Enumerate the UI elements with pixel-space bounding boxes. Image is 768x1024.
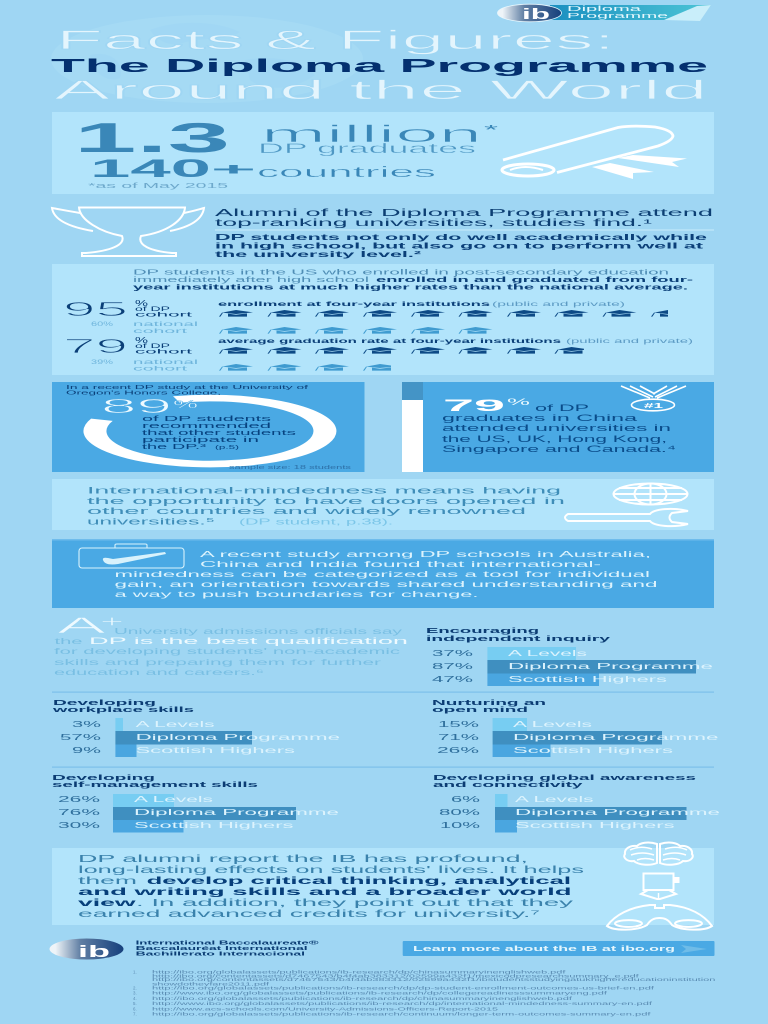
- label: enrollment: (public and private): [492, 301, 625, 308]
- text: organisation names: International Baccalaureate®: [136, 940, 319, 946]
- quote text: universities.⁵: [87, 516, 215, 528]
- label: graduation: average graduation rate at four-year institutions: [218, 338, 562, 345]
- stat: 79% of DP cohort: %: [135, 336, 148, 345]
- values: 6%: [451, 795, 480, 804]
- stat: 79% of DP cohort: 79: [63, 336, 128, 358]
- stat: 95% of DP cohort: %: [135, 299, 148, 308]
- pictogram: 39% national graduation caps: [219, 364, 397, 371]
- alumni text: develop critical thinking, analytical: [147, 876, 571, 887]
- asterisk: *: [484, 122, 498, 137]
- stat: 39% national cohort: national: [133, 359, 199, 366]
- text: study findings: [114, 549, 658, 599]
- pictogram: 60% national enrolment caps: [219, 327, 492, 334]
- references: 4.: [133, 996, 137, 1001]
- chart heading: workplace skills: [51, 705, 194, 714]
- footnote: *as of May 2015: [88, 181, 228, 190]
- chart heading: [52, 773, 258, 789]
- bar labels: [136, 720, 340, 755]
- chart heading: Encouraging: [426, 626, 540, 635]
- icon: binoculars: [607, 905, 712, 930]
- values: 9%: [72, 746, 101, 755]
- values: 57%: [60, 733, 101, 742]
- bar labels: Scottish Highers: [134, 821, 294, 830]
- references: http://ibo.org/globalassets/publications/ib-research/continuum/longer-term-outcomes-summary-en.pdf: [152, 1012, 652, 1016]
- text: alumni statement: [215, 208, 714, 259]
- headline number: 1.3: 1.3: [74, 114, 230, 161]
- text: China: of DP: [535, 403, 589, 413]
- values: 26%: [437, 746, 479, 755]
- text: China: attended universities in: [442, 423, 671, 433]
- panel: US enrolment and graduation: [52, 264, 714, 375]
- bar labels: A Levels: [136, 720, 215, 729]
- values: 71%: [438, 733, 479, 742]
- bar labels: A Levels: [515, 795, 594, 804]
- text: study findings: gain, an orientation towards shared understanding and: [114, 579, 658, 589]
- note: sample size: sample size: 18 students: [229, 465, 351, 471]
- text: university admissions officials: for developing students' non-academic: [54, 647, 400, 656]
- quote text: (DP student, p.38).: [239, 518, 393, 526]
- values: [437, 720, 479, 755]
- bars: [115, 718, 252, 757]
- text: organisation names: [136, 940, 319, 958]
- stat: 60% national cohort: national: [133, 321, 199, 328]
- icon: A+: A: [57, 613, 107, 638]
- text: China: [442, 403, 676, 454]
- icon: A+: [57, 612, 124, 638]
- logo: IB Diploma Programme: ib: [522, 6, 550, 23]
- panel: University of Oregon study: [52, 382, 364, 472]
- panel intro text: year institutions at much higher rates than the national average.: [133, 282, 688, 292]
- stat: 79%: 79: [443, 396, 505, 415]
- bar labels: Diploma Programme: [136, 733, 340, 742]
- stat: 39% national cohort: [91, 359, 199, 372]
- chart heading: Developing: [53, 698, 157, 707]
- chart: developing global awareness and connectivity: [433, 773, 720, 832]
- references: 5.: [133, 1001, 137, 1006]
- references: http://www.ibo.org/globalassets/publications/ib-research/dp/international-mindedness-summary-en.pdf: [152, 1001, 654, 1006]
- stat: 95% of DP cohort: [63, 299, 192, 321]
- alumni text: long-lasting effects on students' lives. It helps: [78, 865, 584, 876]
- values: 26%: [58, 795, 100, 804]
- panel intro text: [133, 268, 695, 292]
- values: 76%: [58, 808, 100, 817]
- references: http://ibo.org/globalassets/publications/ib-research/dp/chinasummaryinenglishweb.pdf: [152, 970, 567, 974]
- chart heading: Nurturing an: [432, 698, 547, 707]
- bars: [113, 794, 296, 832]
- chart: developing workplace skills: [51, 698, 340, 757]
- stat: 60% national cohort: [91, 321, 199, 335]
- text: organisation names: Baccalauréat International: [136, 946, 309, 952]
- icon: A+: +: [100, 612, 124, 631]
- label: enrollment: [218, 301, 625, 308]
- icon: briefcase with tick: [79, 544, 184, 568]
- stat: 89%: %: [173, 399, 199, 411]
- pictogram: 95% DP enrolment caps: [219, 310, 685, 317]
- chart heading: self-management skills: [52, 780, 258, 789]
- quote text: other countries and widely renowned: [87, 506, 526, 517]
- quote text: [87, 486, 565, 528]
- text: recommendation: (p.5): [215, 445, 239, 451]
- bar labels: Scottish Highers: [136, 746, 295, 755]
- label: DP graduates: DP graduates: [258, 141, 477, 156]
- quote text: International-mindedness means having: [87, 486, 561, 496]
- logo: IB Diploma Programme: [498, 4, 711, 23]
- text: China: the US, UK, Hong Kong,: [442, 434, 667, 444]
- progress bar: 79%: [402, 382, 423, 472]
- stat: 95% of DP cohort: of DP: [135, 306, 171, 313]
- panel: alumni report: [52, 843, 714, 930]
- text: university admissions officials: [54, 627, 408, 677]
- alumni text: DP alumni report the IB has profound,: [78, 854, 528, 865]
- values: 87%: [432, 662, 473, 671]
- logo: International Baccalaureate: ib: [78, 942, 110, 961]
- logo: IB Diploma Programme: Diploma: [567, 6, 641, 13]
- text: study findings: A recent study among DP schools in Australia,: [200, 549, 651, 559]
- values: 10%: [440, 821, 480, 830]
- bar labels: Scottish Highers: [515, 821, 675, 830]
- button: learn more: Learn more about the IB at ibo.org: [413, 944, 676, 953]
- text: alumni statement: in high school, but also go on to perform well at: [215, 242, 704, 250]
- references: http://www.ibo.org/globalassets/publications/ib-research/dp/collegereadinesssummaryeng.pdf: [152, 990, 609, 996]
- panel intro: [66, 385, 309, 396]
- chart: developing self-management skills: [52, 773, 339, 832]
- text: recommendation: that other students: [142, 428, 297, 437]
- bar labels: [134, 795, 339, 830]
- chart heading: Developing global awareness: [433, 773, 696, 782]
- logo: IB Diploma Programme: Programme: [567, 13, 668, 20]
- text: study findings: China and India found that international-: [200, 559, 601, 569]
- logo: International Baccalaureate: [50, 938, 124, 961]
- references: 2.: [133, 986, 137, 990]
- text: study findings: mindedness can be categorized as a tool for individual: [114, 569, 650, 579]
- references: http://ibo.org/contentassets/d7467543/b4f4ab383312/02599a432f1/mexicodpresearchsummary_e.pdf: [152, 974, 641, 978]
- text: university admissions officials: DP is the best qualification: [89, 636, 408, 646]
- references: http://ibo.org/globalassets/publications/ib-research/dp/chinasummaryinenglishweb.pdf: [152, 996, 574, 1001]
- panel: international-mindedness quote: [52, 479, 714, 530]
- icon: trophy: [52, 208, 204, 256]
- title: The Diploma Programme: [51, 56, 708, 76]
- title: Facts & Figures:: [56, 25, 615, 55]
- text: university admissions officials: education and careers.⁶: [54, 668, 264, 677]
- chart heading: open mind: [432, 705, 529, 714]
- references: [133, 970, 717, 1016]
- stat: 95% of DP cohort: 95: [63, 299, 128, 321]
- bar labels: Diploma Programme: [513, 733, 718, 742]
- icon: brain: [624, 843, 693, 865]
- chart heading: Developing: [52, 773, 156, 782]
- text: university admissions officials: the: [54, 637, 84, 646]
- bars: [495, 794, 686, 832]
- donut chart: 89%: [95, 398, 325, 464]
- bars: [487, 647, 696, 686]
- text: recommendation: recommended: [142, 421, 271, 430]
- chart heading: independent inquiry: [426, 634, 612, 643]
- stat: 95% of DP cohort: cohort: [135, 312, 192, 318]
- values: 3%: [72, 720, 101, 729]
- chart heading: [432, 698, 547, 714]
- label: countries: countries: [257, 164, 436, 181]
- stat: 39% national cohort: cohort: [133, 366, 187, 372]
- chart heading: [51, 698, 194, 714]
- icon: arrow: [681, 945, 707, 953]
- title: Around the World: [54, 75, 708, 105]
- text: China: Singapore and Canada.⁴: [442, 444, 676, 454]
- references: http://ibo.org/globalassets/publications/ib-research/dp/dp-student-enrollment-outcomes-us-brief-en.pdf: [152, 986, 656, 990]
- alumni text: . In addition, they point out that they: [136, 898, 575, 909]
- panel intro text: immediately after high school: [133, 275, 370, 284]
- bar labels: A Levels: [508, 649, 587, 658]
- plus sign: +: [211, 160, 256, 179]
- values: [60, 720, 101, 755]
- references: http://ibo.org/contentassets/d7467543/b4f4ab383312/02599a432f1/ibstudentsstudyingatukhighereducationinstitution: [152, 977, 717, 982]
- values: [432, 649, 473, 684]
- icon: fountain pen: [641, 874, 680, 899]
- bars: [493, 718, 662, 757]
- alumni text: view: [78, 898, 138, 909]
- bar labels: Scottish Highers: [508, 675, 667, 684]
- values: [439, 795, 480, 830]
- panel intro text: DP students in the US who enrolled in post-secondary education: [133, 268, 669, 276]
- bar labels: Scottish Highers: [513, 746, 673, 755]
- pictogram: 79% DP graduation caps: [219, 347, 588, 354]
- icon: globe: [614, 484, 688, 504]
- alumni text: [78, 854, 584, 920]
- panel intro text: enrolled in and graduated from four-: [376, 275, 695, 284]
- references: showdotheyfare2011.pdf: [152, 982, 271, 986]
- text: recommendation: the DP.³: [142, 442, 208, 451]
- values: 47%: [432, 675, 473, 684]
- title: [51, 25, 708, 105]
- icon: wrench: [565, 509, 688, 526]
- values: 30%: [58, 821, 100, 830]
- bar labels: [515, 795, 720, 830]
- stat: 79%: [443, 396, 530, 415]
- values: 37%: [432, 649, 473, 658]
- panel: international study: [52, 539, 714, 608]
- references: http://www.acs-schools.com/University-Admissions-Officers-Report-2015: [152, 1006, 499, 1012]
- bar labels: Diploma Programme: [134, 808, 339, 817]
- references: 6.: [133, 1006, 137, 1012]
- label: graduation: [218, 338, 693, 345]
- values: 15%: [438, 720, 479, 729]
- stat: 79% of DP cohort: cohort: [135, 348, 192, 356]
- text: university admissions officials: skills and preparing them for further: [54, 658, 382, 667]
- references: 3.: [133, 990, 137, 996]
- alumni text: earned advanced credits for university.⁷: [78, 909, 541, 920]
- panel: graduates: [52, 112, 714, 194]
- text: alumni statement: the university level.²: [215, 250, 422, 259]
- bar labels: [513, 720, 718, 755]
- label: enrollment: enrollment at four-year institutions: [218, 301, 491, 308]
- chart: encouraging independent inquiry: [426, 626, 713, 686]
- text: alumni statement: Alumni of the Diploma Programme attend: [215, 208, 713, 219]
- values: [58, 795, 100, 830]
- panel intro: In a recent DP study at the University of: [66, 385, 309, 391]
- label: graduation: (public and private): [566, 338, 693, 345]
- bar labels: A Levels: [134, 795, 213, 804]
- bar labels: Diploma Programme: [508, 662, 713, 671]
- quote text: the opportunity to have doors opened in: [87, 496, 565, 507]
- text: alumni statement: DP students not only do well academically while: [215, 233, 708, 242]
- bar labels: A Levels: [513, 720, 592, 729]
- alumni text: them: [78, 876, 137, 887]
- stat: 89%: 89: [101, 396, 172, 418]
- alumni text: and writing skills and a broader world: [78, 887, 572, 898]
- icon: medal: [621, 386, 686, 411]
- button: learn more: [403, 941, 714, 956]
- text: study findings: a way to push boundaries for change.: [114, 589, 478, 599]
- chart heading: [433, 773, 696, 789]
- background globe watermark: [51, 15, 363, 103]
- chart heading: and connectivity: [433, 780, 585, 789]
- panel intro: Oregon's Honors College,: [66, 390, 222, 396]
- icon: diploma scroll: [502, 126, 687, 179]
- stat: 39% national cohort: 39%: [91, 359, 113, 366]
- bar labels: [508, 649, 713, 684]
- chart: nurturing an open mind: [432, 698, 718, 757]
- text: recommendation: [142, 414, 297, 451]
- text: organisation names: Bachillerato Internacional: [136, 952, 306, 958]
- chart heading: [426, 626, 612, 643]
- values: 80%: [439, 808, 480, 817]
- text: recommendation: participate in: [142, 435, 259, 444]
- text: China: graduates in China: [442, 413, 639, 423]
- stat: 60% national cohort: cohort: [133, 328, 187, 335]
- stat: 79%: %: [507, 397, 530, 407]
- icon: medal: #1: [644, 401, 663, 410]
- stat: 89%: [101, 396, 199, 418]
- text: recommendation: of DP students: [142, 414, 272, 423]
- label: million: million: [261, 121, 482, 148]
- stat: 60% national cohort: 60%: [91, 321, 113, 328]
- panel: DP graduates in China: [402, 382, 714, 472]
- references: 1.: [133, 970, 137, 974]
- references: 7.: [133, 1012, 137, 1016]
- bar labels: Diploma Programme: [515, 808, 720, 817]
- headline number: 140: 140: [90, 155, 211, 183]
- stat: 79% of DP cohort: of DP: [135, 343, 171, 350]
- stat: 79% of DP cohort: [63, 336, 192, 358]
- text: university admissions officials: University admissions officials say: [114, 627, 404, 636]
- text: alumni statement: top-ranking universities, studies find.¹: [215, 218, 654, 229]
